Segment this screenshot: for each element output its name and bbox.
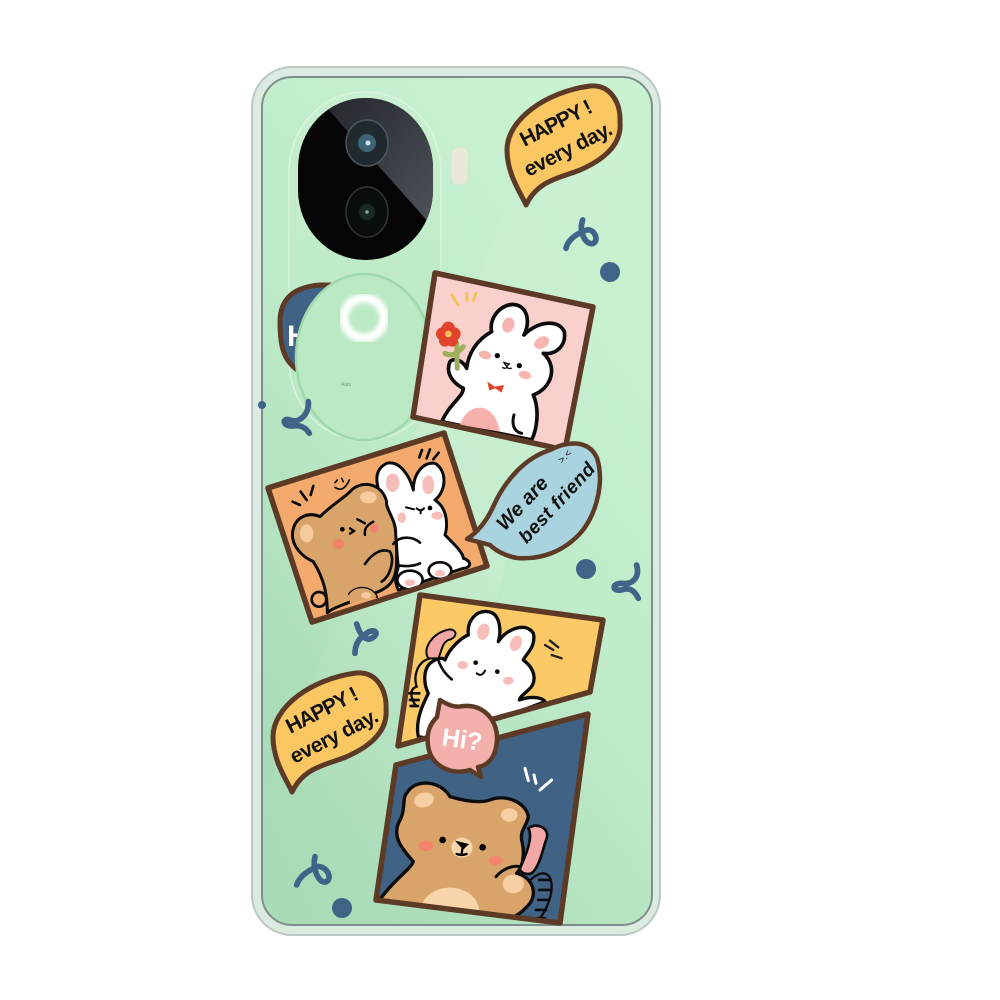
- camera module: [289, 92, 441, 440]
- round camera disc: [296, 274, 432, 440]
- squiggle top right: [566, 220, 596, 248]
- sticker: bear and bunny hugging: [268, 433, 487, 622]
- flower: [445, 343, 463, 368]
- bunny: [436, 293, 565, 440]
- speech bubble: Hi: Hi?: [440, 723, 484, 757]
- squiggle middle left: [355, 624, 376, 653]
- cut-off navy speech bubble: H: [287, 320, 309, 353]
- flash: [451, 147, 468, 185]
- sticker: bunny on the phone: [398, 595, 603, 746]
- camera lens housing: [298, 98, 440, 260]
- speech bubble: we are best friend: best friend: [515, 459, 600, 548]
- speech bubble: happy every day top: [507, 86, 620, 205]
- sticker: bear on the phone: [376, 714, 588, 936]
- speech bubble: happy every day bottom: every day.: [286, 704, 382, 768]
- squiggle middle right: [614, 565, 638, 598]
- small brand text: Aufu: [341, 382, 352, 388]
- dot middle right: [576, 559, 596, 579]
- dot top right: [600, 262, 620, 282]
- sticker: bunny with flower: [413, 273, 593, 450]
- speech bubble: happy every day bottom: HAPPY !: [282, 682, 362, 738]
- speech bubble: we are best friend: [467, 443, 600, 558]
- cut-off navy speech bubble: [280, 285, 335, 372]
- bunny: [377, 463, 470, 590]
- speech bubble: happy every day top: HAPPY !: [516, 95, 596, 151]
- speech bubble: we are best friend: >.<: [556, 448, 574, 466]
- bear: [378, 783, 533, 927]
- dot bottom left: [332, 898, 352, 918]
- partial dot left: [258, 401, 266, 409]
- bunny: [418, 611, 545, 740]
- cord: [530, 872, 553, 917]
- squiggle bottom left: [297, 857, 329, 885]
- handset: [520, 826, 547, 874]
- speech bubble: happy every day top: every day.: [520, 117, 616, 181]
- squiggle left: [284, 402, 309, 433]
- speech bubble: we are best friend: We are: [492, 472, 553, 535]
- phone case: [252, 67, 660, 935]
- light ring: [344, 298, 384, 338]
- phone cord: [411, 658, 430, 707]
- handset: [426, 629, 455, 658]
- bear: [312, 592, 326, 607]
- speech bubble: Hi: [428, 700, 497, 777]
- speech bubble: happy every day bottom: [273, 673, 386, 792]
